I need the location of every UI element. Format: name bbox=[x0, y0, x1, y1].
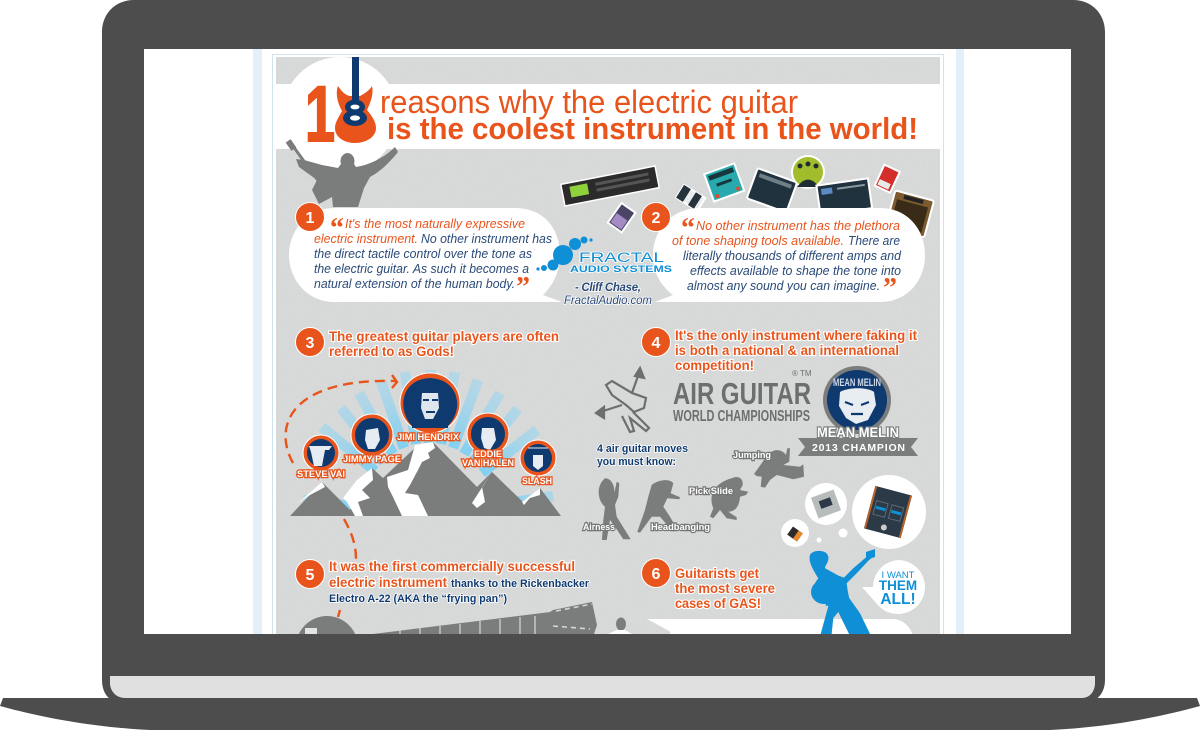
heading 5: Electro A-22 (AKA the “frying pan”) bbox=[329, 593, 507, 605]
number badge 5 bbox=[296, 560, 324, 588]
number badge 6: 6 bbox=[652, 566, 661, 583]
icon: air guitar hand with arrows bbox=[596, 368, 649, 432]
attribution: - Cliff Chase, bbox=[575, 282, 641, 294]
speech bubble: next quote bbox=[647, 619, 914, 640]
silhouette: guitarist with raised arms bbox=[286, 139, 398, 207]
heading 3: referred to as Gods! bbox=[329, 344, 454, 359]
quote text: literally thousands of different amps and bbox=[683, 249, 902, 263]
number badge 1 bbox=[296, 202, 324, 232]
quote text bbox=[314, 213, 552, 303]
portrait: Eddie Van Halen: VAN HALEN bbox=[462, 458, 514, 469]
logo: Air Guitar World Championships bbox=[673, 369, 812, 425]
big number one: 1 bbox=[305, 69, 335, 158]
quote text: It's the most naturally expressive bbox=[345, 217, 525, 231]
panel: reason 1 quote bbox=[289, 202, 562, 303]
silhouette: headbanging bbox=[637, 480, 710, 533]
number badge 5: 5 bbox=[306, 567, 315, 584]
silhouette: airness bbox=[583, 478, 631, 540]
silhouette: jumping: Jumping bbox=[733, 450, 771, 461]
silhouette: airness: Airness bbox=[583, 522, 615, 533]
red pedal bbox=[875, 165, 900, 193]
speech bubble 1 bbox=[289, 208, 562, 302]
badge: Mean Melin champion: MEAN MELIN bbox=[833, 377, 881, 389]
heading 5: It was the first commercially successful bbox=[329, 559, 575, 574]
logo: Fractal Audio Systems bbox=[536, 236, 672, 307]
subheading: air guitar moves: 4 air guitar moves bbox=[597, 443, 688, 455]
heading 6: Guitarists get bbox=[675, 566, 759, 581]
thought bubbles with pedals bbox=[781, 475, 926, 549]
heading 5: electric instrument bbox=[329, 575, 447, 590]
portrait: Slash bbox=[520, 440, 556, 487]
quote text: No other instrument has the plethora bbox=[696, 219, 900, 233]
number badge 2: 2 bbox=[652, 210, 661, 227]
speech bubble: I want them all bbox=[862, 560, 925, 614]
number badge 1: 1 bbox=[306, 210, 315, 227]
heading 5 bbox=[329, 559, 590, 605]
quote text: the electric guitar. As such it becomes a bbox=[314, 262, 529, 276]
laptop base bbox=[0, 698, 1200, 730]
illustration: frying pan guitar bbox=[296, 602, 597, 678]
speech bubble: I want them all: I WANT bbox=[882, 570, 915, 581]
heading 4: is both a national & an international bbox=[675, 343, 899, 358]
quote text: “ bbox=[681, 213, 695, 244]
silhouette: headbanging: Headbanging bbox=[651, 522, 710, 533]
page column rails bbox=[253, 49, 964, 644]
quote text: electric instrument. bbox=[314, 232, 418, 246]
logo: Fractal Audio Systems: FractalAudio.com bbox=[564, 295, 652, 307]
heading 4: competition! bbox=[675, 358, 754, 373]
teal pedal bbox=[704, 163, 744, 202]
portrait: Jimi Hendrix bbox=[397, 373, 460, 443]
quote text: of tone shaping tools available. bbox=[672, 234, 844, 248]
icon: guitar forming the number 8 bbox=[335, 57, 376, 143]
white and dark pedal bbox=[676, 185, 705, 211]
title line one: reasons why the electric guitar bbox=[380, 84, 798, 120]
silhouette: pick slide bbox=[689, 477, 748, 520]
pedal: silver pedal in medium bubble bbox=[811, 490, 841, 518]
dark multi-effects board bbox=[816, 178, 872, 215]
quote text: ” bbox=[516, 272, 530, 303]
speech bubble: I want them all: THEM bbox=[879, 578, 917, 593]
icon group: effects pedals and amps bbox=[561, 156, 934, 237]
mountains bbox=[290, 442, 561, 516]
heading 6: the most severe bbox=[675, 581, 775, 596]
logo: Air Guitar World Championships: WORLD CHAMPIONSHIPS bbox=[673, 408, 810, 425]
quote text: There are bbox=[848, 234, 900, 248]
quote text: natural extension of the human body. bbox=[314, 277, 515, 291]
heading 3: The greatest guitar players are often bbox=[329, 329, 559, 344]
silhouette: jumping bbox=[733, 448, 804, 488]
portrait: Steve Vai bbox=[297, 435, 345, 480]
panel: reason 4 air guitar bbox=[583, 328, 918, 540]
subheading: air guitar moves: you must know: bbox=[597, 456, 676, 468]
brown combo amp bbox=[886, 190, 934, 237]
title line two: is the coolest instrument in the world! bbox=[387, 111, 918, 146]
logo: Fractal Audio Systems: AUDIO SYSTEMS bbox=[570, 264, 672, 275]
pedal: orange pedal in small bubble bbox=[787, 526, 803, 542]
screen background bbox=[144, 49, 1071, 639]
figure: inventor in white shirt bbox=[608, 618, 632, 634]
quote text: the direct tactile control over the tone as bbox=[314, 247, 532, 261]
heading 6 bbox=[675, 566, 775, 611]
logo: Air Guitar World Championships: ® TM bbox=[792, 369, 812, 378]
number badge 3 bbox=[296, 328, 324, 356]
dark amp head bbox=[747, 168, 797, 213]
heading 5: thanks to the Rickenbacker bbox=[451, 578, 590, 590]
purple pedal bbox=[608, 203, 635, 232]
speech bubble: I want them all: ALL! bbox=[880, 591, 916, 608]
sun rays bbox=[303, 370, 553, 508]
quote text: “ bbox=[330, 213, 344, 244]
portrait: Eddie Van Halen bbox=[462, 413, 514, 469]
heading 6: cases of GAS! bbox=[675, 596, 761, 611]
speech bubble 2 bbox=[653, 208, 925, 302]
heading 4 bbox=[675, 328, 917, 373]
logo: Fractal Audio Systems: FRACTAL bbox=[579, 250, 665, 265]
dashed connector from reason 3 to reason 5 bbox=[338, 519, 356, 617]
portrait: Jimmy Page bbox=[343, 414, 401, 465]
quote text bbox=[672, 213, 902, 304]
textured gray infographic background bbox=[276, 57, 940, 637]
portrait: Steve Vai: STEVE VAI bbox=[297, 469, 345, 480]
panel: reason 2 quote bbox=[642, 202, 925, 304]
heading 4: It's the only instrument where faking it bbox=[675, 328, 917, 343]
silhouette: blue guitarist bbox=[810, 549, 875, 640]
portrait: Slash: SLASH bbox=[522, 476, 552, 487]
silhouette: pick slide: Pick Slide bbox=[689, 486, 733, 497]
badge: Mean Melin champion bbox=[798, 366, 918, 456]
quote text: No other instrument has bbox=[421, 232, 552, 246]
logo: Air Guitar World Championships: AIR GUITAR bbox=[673, 376, 811, 411]
subheading: air guitar moves bbox=[597, 443, 688, 468]
title banner bbox=[276, 57, 940, 173]
portrait: Eddie Van Halen: EDDIE bbox=[474, 449, 502, 460]
panel: reason 5 frying pan bbox=[296, 559, 632, 678]
portrait: Jimmy Page: JIMMY PAGE bbox=[343, 454, 401, 465]
ribbon bbox=[798, 438, 918, 456]
pedal: dual pedal in large bubble bbox=[864, 486, 912, 538]
heading 3 bbox=[329, 329, 559, 359]
laptop lower lip bbox=[110, 676, 1095, 698]
quote text: ” bbox=[883, 273, 897, 304]
portrait: Jimi Hendrix: JIMI HENDRIX bbox=[397, 432, 460, 443]
panel: reason 3 gods of guitar bbox=[286, 328, 561, 516]
number badge 6 bbox=[642, 558, 670, 588]
quote text: almost any sound you can imagine. bbox=[687, 279, 880, 293]
rack processor bbox=[561, 166, 659, 206]
number badge 4: 4 bbox=[652, 335, 661, 352]
dashed arrow to Hendrix bbox=[286, 375, 397, 463]
number badge 2 bbox=[642, 202, 670, 232]
badge: Mean Melin champion: MEAN MELIN bbox=[817, 425, 899, 440]
green fuzz pedal bbox=[792, 156, 824, 188]
number badge 3: 3 bbox=[306, 335, 315, 352]
badge: Mean Melin champion: 2013 CHAMPION bbox=[812, 442, 905, 454]
number badge 4 bbox=[642, 328, 670, 356]
quote text: effects available to shape the tone into bbox=[690, 264, 901, 278]
